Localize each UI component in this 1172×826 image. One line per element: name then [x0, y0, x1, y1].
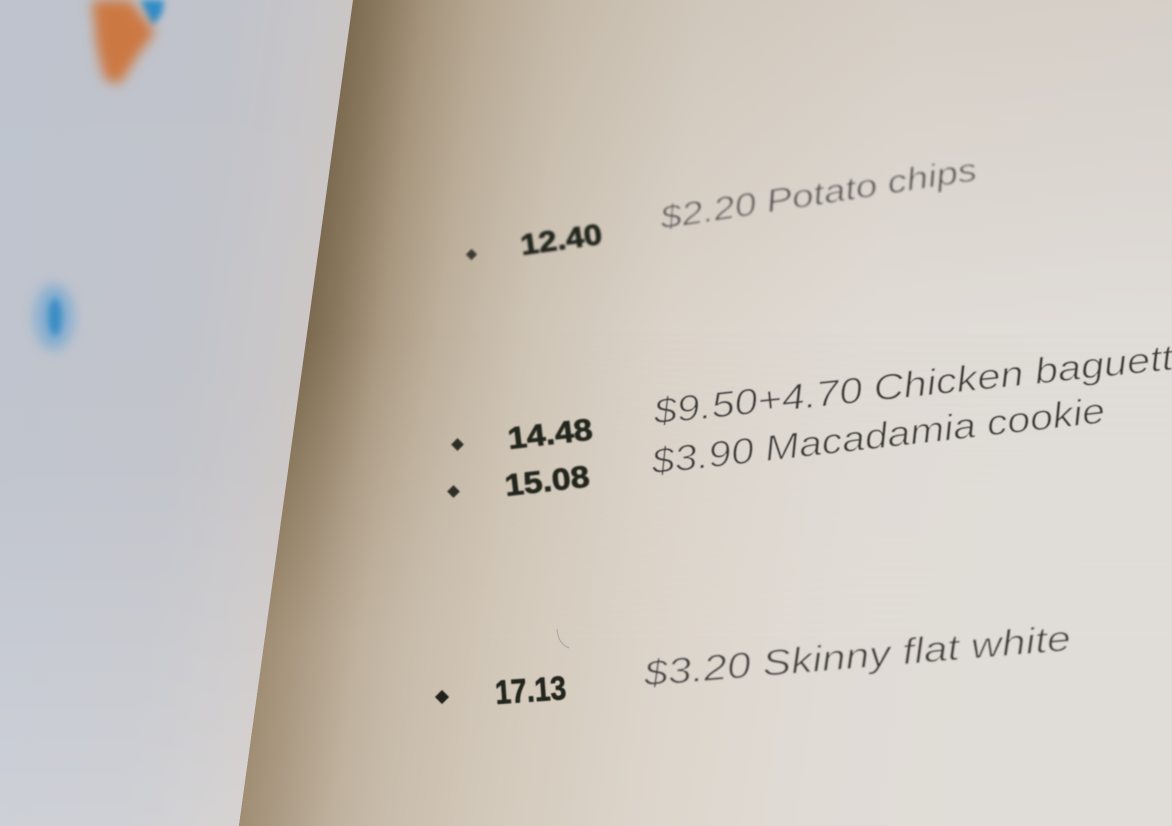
- icon: blurred blue dot: [34, 284, 74, 350]
- time: 15.08: [503, 459, 591, 503]
- entry: 15.08 macadamia cookie: [447, 390, 1107, 503]
- item: cropped at the photo edge: $9.50+4.70 Chicken baguett: [650, 336, 1172, 432]
- marker: [451, 438, 464, 451]
- time: 17.13: [494, 669, 567, 711]
- marker: [435, 690, 449, 704]
- item: $2.20 Potato chips: [656, 151, 979, 236]
- page scratch: [557, 629, 569, 648]
- panel: right page: [239, 0, 1172, 826]
- marker: [466, 249, 477, 260]
- time: 12.40: [519, 219, 604, 262]
- time: 14.48: [506, 412, 594, 456]
- icon: blurred orange and blue shape: [92, 0, 164, 84]
- item: $3.90 Macadamia cookie: [648, 390, 1107, 482]
- entry: 14.48 chicken baguette: [451, 336, 1172, 456]
- panel: left page: [0, 0, 353, 826]
- entry: 17.13 skinny flat white: [435, 617, 1072, 711]
- item: $3.20 Skinny flat white: [641, 617, 1072, 694]
- marker: [447, 485, 460, 498]
- entry: 12.40 potato chips: [466, 151, 979, 262]
